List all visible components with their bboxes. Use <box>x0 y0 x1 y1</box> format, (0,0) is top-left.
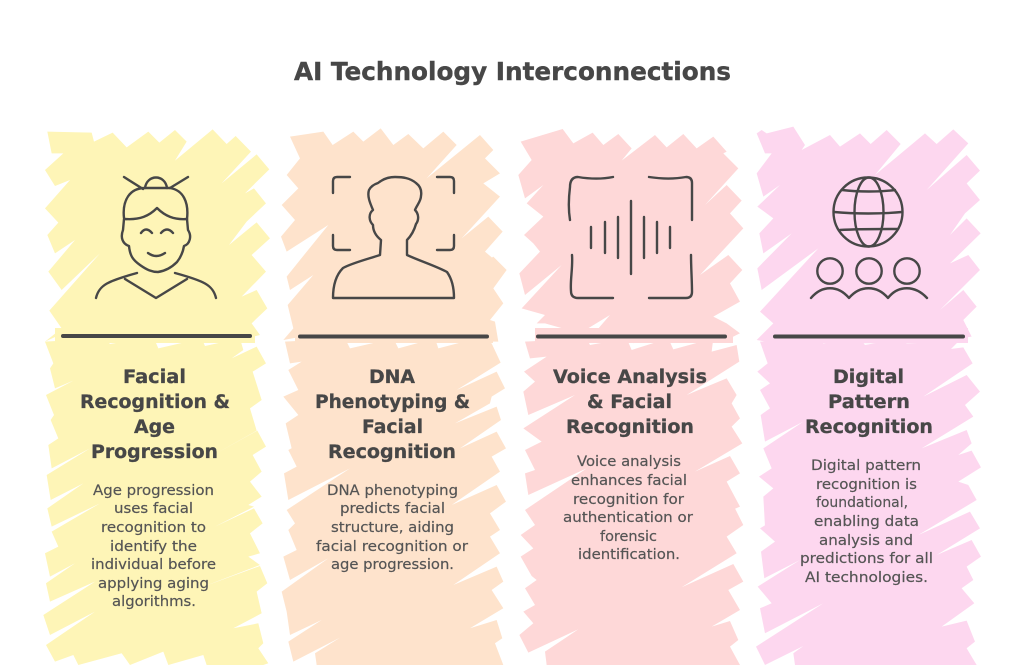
panel: facial recognition and age progression <box>43 129 270 665</box>
heading: Recognition <box>805 417 933 438</box>
description <box>91 483 216 610</box>
heading: Progression <box>91 442 218 463</box>
icon: globe above three people <box>811 178 927 298</box>
description <box>563 454 693 563</box>
heading: Facial <box>123 367 186 388</box>
brush background: magenta <box>756 127 981 665</box>
description: DNA phenotyping <box>327 483 458 499</box>
description: predicts facial <box>340 501 445 517</box>
description: recognition is <box>816 477 917 493</box>
description: recognition for <box>573 492 684 508</box>
description: enabling data <box>814 514 919 530</box>
divider line <box>775 334 963 338</box>
description: forensic <box>600 529 657 545</box>
description: predictions for all <box>800 551 933 567</box>
panel: voice analysis and facial recognition <box>518 129 743 665</box>
description: Voice analysis <box>577 454 681 470</box>
description: applying aging <box>98 576 209 592</box>
description: foundational, <box>816 495 908 511</box>
icon: woman with hair bun <box>96 177 216 298</box>
heading: Recognition & <box>80 392 230 413</box>
description: identification. <box>578 547 680 563</box>
heading: Facial <box>362 417 423 438</box>
icon: voice waveform in frame <box>569 177 692 298</box>
description: authentication or <box>563 510 693 526</box>
heading <box>805 367 933 438</box>
description: identify the <box>110 539 197 555</box>
description: facial recognition or <box>316 539 468 555</box>
description: recognition to <box>101 520 206 536</box>
divider line <box>63 334 250 338</box>
brush background: pink <box>518 129 743 665</box>
description: enhances facial <box>571 473 687 489</box>
description: AI technologies. <box>805 570 928 586</box>
heading: Age <box>134 417 175 438</box>
description: Digital pattern <box>811 458 921 474</box>
heading <box>553 367 707 438</box>
description: individual before <box>91 557 216 573</box>
description: Age progression <box>93 483 214 499</box>
description <box>800 458 933 586</box>
heading: & Facial <box>587 392 672 413</box>
title: AI Technology Interconnections <box>294 57 731 86</box>
description: age progression. <box>331 557 454 573</box>
heading: Recognition <box>566 417 694 438</box>
description <box>316 483 468 573</box>
panel: DNA phenotyping and facial recognition <box>281 128 507 665</box>
heading: Pattern <box>828 392 910 413</box>
description: uses facial <box>114 501 193 517</box>
heading <box>80 367 230 463</box>
brush background: yellow <box>43 129 270 665</box>
description: analysis and <box>819 533 913 549</box>
heading: Phenotyping & <box>315 392 470 413</box>
brush background: peach <box>281 128 507 665</box>
icon: face scan silhouette <box>333 177 454 298</box>
heading: Digital <box>833 367 904 388</box>
description: algorithms. <box>112 594 196 610</box>
description: structure, aiding <box>331 520 454 536</box>
heading: Voice Analysis <box>553 367 707 388</box>
divider line <box>300 334 487 338</box>
heading: Recognition <box>328 442 456 463</box>
heading: DNA <box>369 367 416 388</box>
panel: digital pattern recognition <box>756 127 981 665</box>
divider line <box>538 334 725 338</box>
heading <box>315 367 470 463</box>
